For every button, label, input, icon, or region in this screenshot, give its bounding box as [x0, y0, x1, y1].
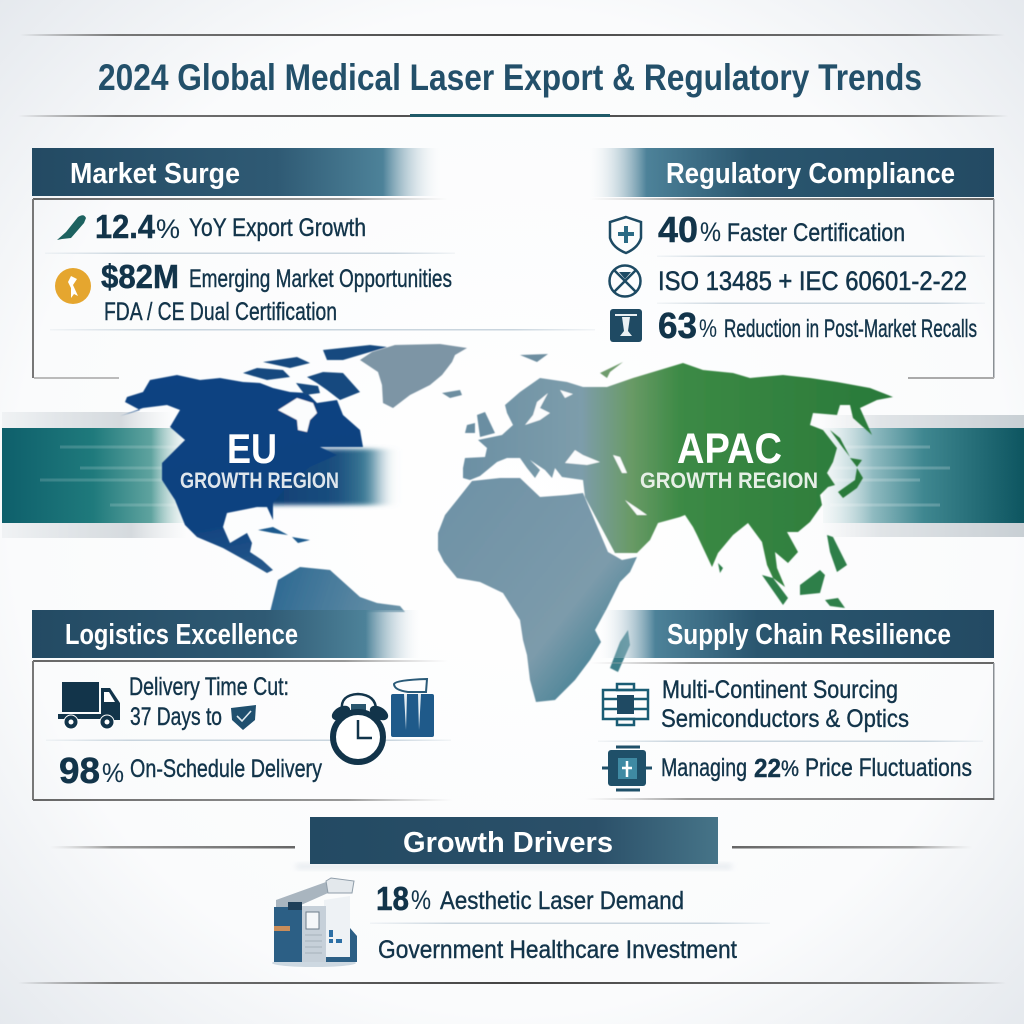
- madagascar: [610, 630, 630, 672]
- teal band right: [820, 415, 1024, 537]
- title block: [18, 34, 1008, 117]
- stat: export growth: %: [156, 214, 180, 244]
- stat: aesthetic laser demand: Aesthetic Laser Demand: [440, 887, 684, 915]
- logistics frame: [32, 660, 453, 801]
- delivery time text: [129, 673, 289, 731]
- novaya zemlya: [600, 362, 623, 378]
- sourcing text: Multi-Continent Sourcing: [662, 676, 898, 704]
- world map: [120, 344, 893, 702]
- great britain and ireland: [465, 412, 495, 437]
- logistics header: [32, 610, 420, 658]
- regulatory frame: [590, 198, 994, 379]
- iceland and svalbard: [442, 354, 548, 398]
- south america: [270, 567, 405, 612]
- panel: regulatory compliance: [590, 148, 994, 379]
- icon: pen: [57, 215, 86, 240]
- stat: recalls: 63: [658, 305, 697, 346]
- stat: aesthetic laser demand: 18: [376, 880, 409, 917]
- stat: faster certification: [658, 209, 905, 250]
- stat: faster certification: %: [700, 217, 721, 247]
- region label: APAC: APAC: [677, 425, 782, 473]
- market surge header: [32, 148, 440, 196]
- growth drivers header: Growth Drivers: [403, 827, 613, 859]
- stat: emerging markets: [101, 258, 452, 295]
- stat: export growth: YoY Export Growth: [189, 214, 366, 242]
- region label: APAC: GROWTH REGION: [640, 468, 818, 493]
- supply chain header: [600, 610, 994, 658]
- region label: EU: [180, 425, 339, 493]
- caribbean islands: [258, 527, 310, 543]
- panel: growth drivers: [18, 817, 1006, 984]
- stat: recalls: %: [699, 315, 717, 343]
- panel: supply chain resilience: [585, 610, 994, 800]
- delivery time text: 37 Days to: [130, 703, 222, 731]
- icon: gold coin: [55, 268, 91, 304]
- price fluctuation text: %: [781, 756, 799, 781]
- stat: emerging markets: $82M: [101, 258, 179, 295]
- logistics header: Logistics Excellence: [65, 619, 298, 651]
- supply chain header: Supply Chain Resilience: [667, 619, 951, 651]
- icon: processor: [602, 747, 652, 790]
- growth drivers side rules: [50, 846, 972, 848]
- growth drivers header: [310, 817, 718, 864]
- delivery time text: Delivery Time Cut:: [129, 673, 289, 701]
- regulatory header: Regulatory Compliance: [666, 158, 955, 190]
- price fluctuation text: 22: [754, 753, 781, 783]
- price fluctuation text: Price Fluctuations: [805, 754, 972, 782]
- icon: case: [391, 679, 434, 737]
- stat: on-schedule delivery: [59, 750, 322, 791]
- stat: on-schedule delivery: %: [102, 758, 124, 788]
- teal band left: [2, 412, 187, 538]
- sourcing text: [661, 676, 909, 733]
- price fluctuation text: Managing: [661, 754, 747, 782]
- southeast asia islands: [718, 535, 847, 608]
- icon: chip: [603, 684, 648, 725]
- icon: check shield: [231, 705, 256, 730]
- arctic islands: [243, 345, 387, 400]
- stat: on-schedule delivery: On-Schedule Delivery: [130, 755, 322, 783]
- sourcing text: Semiconductors & Optics: [661, 705, 909, 733]
- greenland: [360, 344, 467, 408]
- panel: logistics excellence: [32, 610, 453, 801]
- icon: alarm clock: [329, 694, 391, 762]
- icon: standard seal: [610, 266, 640, 296]
- panel: market surge: [32, 148, 595, 379]
- icon: shield: [610, 217, 641, 253]
- stat: export growth: [95, 208, 366, 245]
- stat: on-schedule delivery: 98: [59, 750, 100, 791]
- market surge frame: [32, 198, 448, 379]
- stat: export growth: 12.4: [95, 208, 156, 245]
- hudson bay: [278, 398, 317, 432]
- stat: emerging markets: Emerging Market Opportunities: [189, 265, 452, 293]
- region label: EU: GROWTH REGION: [180, 468, 339, 493]
- japan, sakhalin and korea coast islands: [830, 430, 863, 498]
- north america: [120, 375, 363, 573]
- stat: faster certification: 40: [658, 209, 698, 250]
- icon: truck: [58, 682, 120, 729]
- supply chain frame: [585, 662, 994, 800]
- price fluctuation text: [661, 753, 972, 783]
- baltic, black and caspian seas, persian gulf: [525, 390, 647, 515]
- icon: laser square: [610, 309, 642, 342]
- eurasia: [463, 363, 893, 587]
- stat: recalls: [658, 305, 977, 346]
- region label: APAC: [640, 425, 818, 493]
- stat: aesthetic laser demand: [376, 880, 684, 917]
- certification text: FDA / CE Dual Certification: [104, 298, 337, 326]
- government investment text: Government Healthcare Investment: [378, 936, 737, 964]
- standards text: ISO 13485 + IEC 60601-2-22: [658, 266, 967, 296]
- africa: [438, 478, 637, 702]
- icon: laser machine: [272, 878, 357, 967]
- regulatory header: [590, 148, 994, 197]
- region label: EU: EU: [227, 425, 277, 472]
- stat: faster certification: Faster Certification: [727, 219, 905, 247]
- market surge header: Market Surge: [70, 158, 240, 190]
- blue streak east of north america: [262, 449, 390, 505]
- stat: aesthetic laser demand: %: [411, 885, 431, 915]
